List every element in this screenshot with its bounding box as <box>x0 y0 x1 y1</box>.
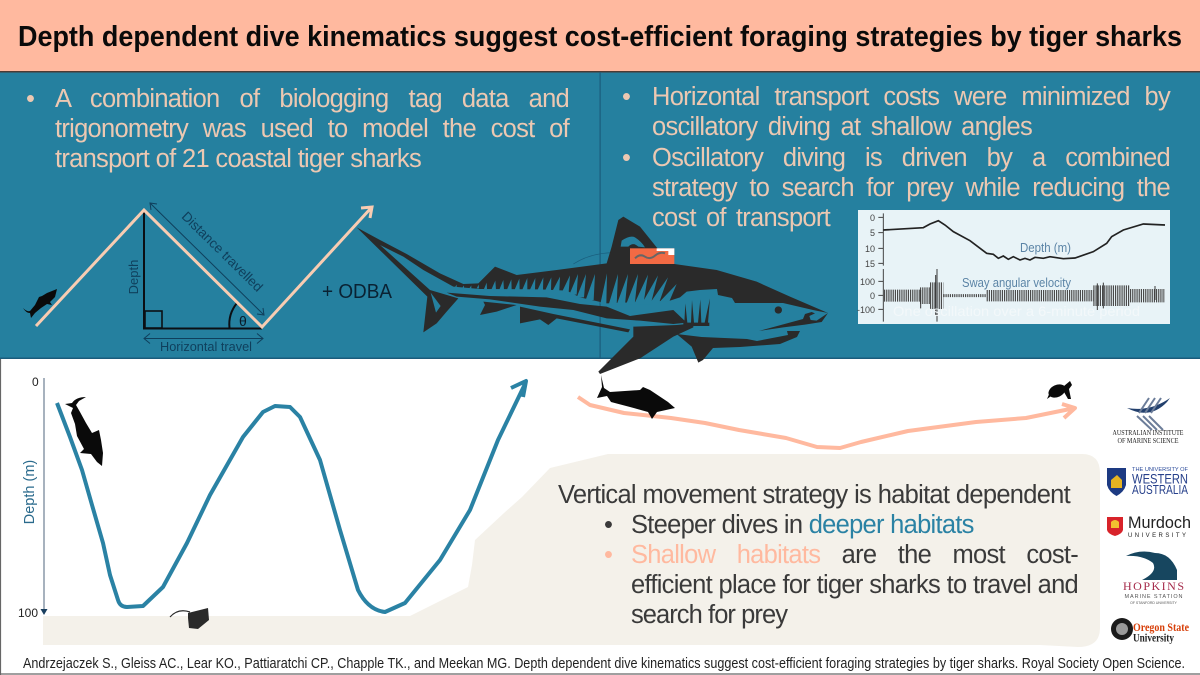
distance travelled arrow: Distance travelled <box>179 209 266 295</box>
lower jaw <box>677 331 800 363</box>
text block: key findings: strategy to search for prey while reducing the <box>652 174 1170 202</box>
title banner <box>0 0 1200 72</box>
chart axis labels: -100 <box>857 305 875 315</box>
upper jaw <box>759 312 828 331</box>
illustration: tagged tiger shark <box>357 217 828 374</box>
eye <box>775 306 782 314</box>
text block: methods summary: • <box>26 85 34 113</box>
logo: Murdoch University <box>1107 514 1191 539</box>
chart axis labels <box>857 213 875 315</box>
text block: key findings: oscillatory diving at shallow angles <box>652 113 1032 141</box>
text block: habitat conclusions: Shallow habitats are the most cost- <box>631 541 1078 569</box>
icon: cruising shark <box>597 375 675 419</box>
panel: depth and sway chart: Sway angular velocity <box>962 275 1071 290</box>
distance travelled arrow <box>150 203 266 315</box>
chart axis labels: 10 <box>865 244 875 254</box>
logo: Oregon State University: Oregon State <box>1133 622 1189 634</box>
chart axis labels: 0 <box>870 291 875 301</box>
logo: University of Western Australia <box>1107 467 1188 497</box>
text block: habitat conclusions: • <box>604 511 612 539</box>
icon: sea turtle <box>1046 381 1072 400</box>
text block: habitat conclusions: Vertical movement strategy is habitat dependent <box>558 481 1070 509</box>
text block: methods summary: transport of 21 coastal tiger sharks <box>55 145 421 173</box>
text block: methods summary <box>26 85 570 173</box>
logo: Australian Institute of Marine Science: AUSTRALIAN INSTITUTE <box>1112 428 1184 437</box>
tail lobe gap <box>431 293 441 313</box>
logo: Hopkins Marine Station <box>1123 552 1184 605</box>
text block: habitat conclusions: search for prey <box>631 601 787 629</box>
logo: University of Western Australia: WESTERN <box>1132 470 1188 486</box>
text block: key findings <box>622 83 1171 232</box>
anal fin <box>480 302 517 315</box>
panel: depth and sway chart <box>857 210 1170 324</box>
logo: Murdoch University: Murdoch <box>1128 514 1191 532</box>
depth axis: 100 <box>18 606 38 620</box>
text block: key findings: Oscillatory diving is driven by a combined <box>652 144 1170 172</box>
gills <box>683 298 710 326</box>
chart series labels: Depth (m) <box>1020 240 1071 255</box>
shallow dive profile <box>578 397 1075 448</box>
shark lower belly band <box>447 293 687 324</box>
text block: habitat conclusions: • <box>604 541 612 569</box>
right triangle <box>144 210 262 328</box>
depth axis: 0 <box>32 375 39 389</box>
logo: Oregon State University <box>1111 618 1189 644</box>
depth axis: Depth (m) <box>22 460 38 524</box>
horizontal travel arrow: Horizontal travel <box>160 339 252 354</box>
pectoral fin <box>598 323 693 374</box>
shark upper body <box>357 217 828 332</box>
frame edge <box>0 359 1200 675</box>
logo: Oregon State University: University <box>1133 632 1174 644</box>
depth axis <box>18 375 48 620</box>
pelvic fin <box>520 307 630 332</box>
logo: Murdoch University: UNIVERSITY <box>1128 533 1186 539</box>
tiger stripes <box>403 237 677 305</box>
text block: methods summary: trigonometry was used to model the cost of <box>55 115 569 143</box>
text block: methods summary: A combination of biologging tag data and <box>55 85 569 113</box>
logo: University of Western Australia: THE UNIVERSITY OF <box>1132 467 1188 473</box>
sway trace <box>884 278 1165 314</box>
biologging tag <box>630 248 674 264</box>
logo: Australian Institute of Marine Science <box>1112 398 1184 445</box>
theta: θ <box>239 313 247 329</box>
panel: depth and sway chart: One oscillation over a 6-minute period <box>893 303 1140 319</box>
logo: Hopkins Marine Station: MARINE STATION <box>1124 594 1183 600</box>
text block: key findings: • <box>622 144 630 172</box>
chart axis labels: 15 <box>865 259 875 269</box>
logo: Australian Institute of Marine Science: OF MARINE SCIENCE <box>1118 437 1178 445</box>
axes <box>878 213 883 322</box>
chart axis labels: 100 <box>860 277 875 287</box>
seabed habitat shape <box>43 454 1100 647</box>
chart axis labels: 5 <box>870 228 875 238</box>
steep dive profile <box>57 381 526 612</box>
trigonometry diagram <box>23 203 393 354</box>
icon: diving shark <box>65 397 103 466</box>
logo: Hopkins Marine Station: HOPKINS <box>1123 579 1184 593</box>
text block: habitat conclusions <box>558 481 1078 629</box>
icon: small shark <box>23 289 57 318</box>
chart axis labels: 0 <box>870 213 875 223</box>
text block: key findings: • <box>622 83 630 111</box>
zigzag dive path <box>36 207 372 327</box>
text block: key findings: cost of transport <box>652 204 830 232</box>
horizontal travel arrow <box>144 334 263 354</box>
depth trace <box>883 221 1165 260</box>
ODBA label: + ODBA <box>322 281 393 303</box>
text block: habitat conclusions: efficient place for tiger sharks to travel and <box>631 571 1078 599</box>
depth label: Depth <box>126 260 141 294</box>
logo: Hopkins Marine Station: OF STANFORD UNIVERSITY <box>1130 601 1178 605</box>
panel: blue methods background <box>0 72 1200 359</box>
text block: habitat conclusions: Steeper dives in deeper habitats <box>631 511 974 539</box>
icon: stingray <box>170 608 209 629</box>
text block: key findings: Horizontal transport costs were minimized by <box>652 83 1170 111</box>
